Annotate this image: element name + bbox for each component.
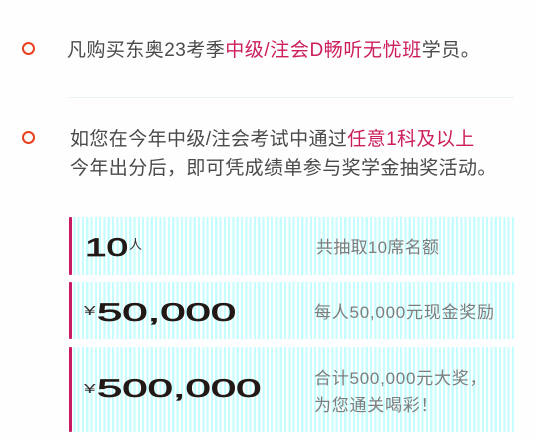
text: second eligibility condition: 今年出分后，即可凭成绩单参与奖学金抽奖活动。 xyxy=(70,158,497,179)
accent bar xyxy=(69,217,72,275)
unit: people: 人 xyxy=(129,237,142,252)
description: total prize: 合计500,000元大奖， xyxy=(314,369,487,388)
panel: award per person xyxy=(69,282,514,339)
text: second eligibility condition xyxy=(70,128,497,179)
bullet: second item xyxy=(22,131,35,144)
description: total prize: 为您通关喝彩！ xyxy=(314,396,438,415)
divider xyxy=(68,97,513,98)
description: winners count: 共抽取10席名额 xyxy=(316,238,439,257)
accent bar xyxy=(69,347,72,432)
description: total prize xyxy=(314,369,487,415)
description: award per person: 每人50,000元现金奖励 xyxy=(314,303,495,322)
currency symbol: ¥ xyxy=(84,381,96,396)
panel: total prize xyxy=(69,347,514,432)
accent bar xyxy=(69,282,72,339)
currency symbol: ¥ xyxy=(84,303,96,318)
figure: 10 people: 10 xyxy=(85,234,128,262)
text: first eligibility condition: 凡购买东奥23考季中级/注会D畅听无忧班学员。 xyxy=(67,40,480,61)
bullet: first item xyxy=(22,42,35,55)
figure: 500,000: 500,000 xyxy=(97,375,261,403)
text: second eligibility condition: 如您在今年中级/注会考试中通过任意1科及以上 xyxy=(70,129,475,150)
figure: 50,000: 50,000 xyxy=(97,299,236,327)
panel: winners count xyxy=(69,217,514,275)
